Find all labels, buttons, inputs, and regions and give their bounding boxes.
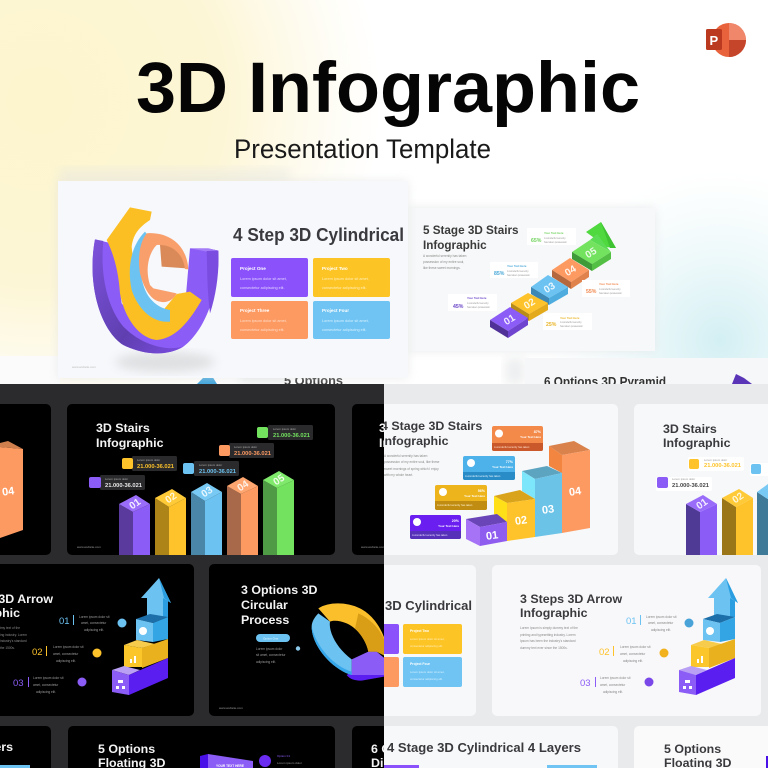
card 56%: A wonderful serenity has taken — [437, 503, 473, 507]
card 56%: 56% — [478, 489, 486, 493]
card: Project One — [231, 258, 308, 297]
chart: circular donut — [312, 603, 387, 681]
label 65%: Your Text Here — [544, 231, 564, 235]
label 85%: Your Text Here — [507, 264, 527, 268]
option marker — [259, 754, 302, 767]
slide heading: 5 Options — [664, 742, 721, 756]
dark slide: 3 Options 3D Circular Process — [209, 564, 384, 716]
step 01 note: adipiscing elit. — [651, 628, 671, 632]
label: orange value — [219, 443, 274, 458]
pillar 01: 01 — [128, 496, 143, 512]
step 03 note: adipiscing elit. — [603, 690, 623, 694]
card: Project Two: Project Two — [322, 266, 348, 271]
card: Project Three: consectetur adipiscing elit. — [240, 328, 285, 332]
label: blue value — [750, 463, 768, 476]
label 85%: 85% — [494, 271, 505, 277]
label 65% — [527, 228, 576, 245]
step 03: 03 — [542, 280, 558, 296]
label 45% — [448, 294, 497, 311]
background wash — [0, 0, 768, 384]
pillar 05 — [263, 471, 294, 555]
stair 03 — [522, 466, 562, 537]
dark slide: 6 Options fragment — [352, 726, 384, 768]
step 02 note: 02 — [32, 647, 43, 658]
option text: Lorem ipsum dolor — [256, 647, 283, 651]
dark half — [0, 384, 412, 768]
slide body text: tmy text of the — [0, 626, 20, 630]
slide body text: industry's standard — [0, 639, 27, 643]
slide heading: Infographic — [663, 436, 731, 450]
label 65%: 65% — [531, 238, 542, 244]
step 01 note — [626, 615, 694, 632]
slide heading: 5 Stage 3D Stairs — [423, 224, 519, 237]
label 85%: has taken possession — [507, 274, 531, 277]
slide body text: A wonderful serenity has taken — [384, 454, 428, 458]
pillar 04: 04 — [236, 478, 251, 494]
card: orange — [370, 657, 399, 687]
dark slide: 3D Stairs Infographic — [67, 404, 335, 555]
slide heading: Infographic — [520, 606, 588, 620]
pillar 05: 05 — [272, 472, 287, 488]
slide heading: 3 Steps 3D Arrow — [520, 592, 622, 606]
slide body text: A wonderful serenity has taken — [423, 254, 467, 258]
card: Project Two — [403, 624, 462, 654]
label 55%: A wonderful serenity — [599, 288, 621, 291]
step 03 note: amet, consectetur — [33, 683, 59, 687]
step 02 note — [32, 645, 102, 663]
option text: adipiscing elit. — [256, 660, 276, 664]
pillar 03 — [757, 484, 768, 555]
card: Project One: consectetur adipiscing elit. — [240, 286, 285, 290]
label: orange value: 21.000-36.021 — [234, 451, 271, 457]
card: Project Two: Lorem ipsum dolor sit amet, — [410, 637, 445, 641]
step 02 note: Lorem ipsum dolor sit — [53, 645, 84, 649]
footer url: www.website.com — [219, 706, 243, 710]
button — [256, 634, 290, 642]
label 25%: Your Text Here — [560, 316, 580, 320]
stair 02 — [494, 490, 535, 541]
arrow stack — [679, 578, 738, 695]
step 03 note: 03 — [13, 678, 24, 689]
pillar 02: 02 — [731, 490, 746, 506]
dark slide: layers fragment — [0, 726, 51, 768]
pillar 03 — [191, 483, 222, 555]
floating plate: YOUR TEXT HERE — [216, 764, 244, 768]
dark slide: right fragment: 3D — [379, 421, 395, 435]
label 25%: A wonderful serenity — [560, 321, 582, 324]
label: yellow value: 21.000-36.021 — [137, 464, 174, 470]
slide heading: Infographic — [381, 434, 449, 448]
card: Project Four: consectetur adipiscing elit. — [322, 328, 367, 332]
slide heading: 3D Arrow — [0, 592, 53, 606]
label 55%: 55% — [586, 289, 597, 295]
option bars — [384, 765, 597, 768]
dark slide: 4 Stage stairs fragment — [0, 404, 51, 555]
peeking row behind the slides: 6 Options 3D Pyramid — [544, 374, 666, 389]
label 55%: has taken possession — [599, 292, 623, 295]
pillar 03: 03 — [200, 484, 215, 500]
step 02 note: amet, consectetur — [620, 652, 646, 656]
card: Project Four: consectetur adipiscing elit. — [410, 677, 443, 681]
label: green value: Lorem ipsum dolor — [273, 427, 296, 431]
slide body text: ing industry. Lorem — [0, 633, 27, 637]
subtitle: Presentation Template — [234, 134, 491, 164]
step 02 note — [599, 645, 668, 663]
chart: 3D cylindrical rings — [93, 207, 219, 353]
label 55%: Your Text Here — [599, 282, 619, 286]
stair 01 — [466, 514, 507, 546]
step 01 — [490, 307, 528, 338]
label: orange value: Lorem ipsum dolor — [234, 445, 257, 449]
dark slide: 3 Steps 3D Arrow — [0, 564, 194, 716]
step 01 note: Lorem ipsum dolor sit — [79, 615, 110, 619]
label: green value — [257, 425, 313, 440]
step 02 note: amet, consectetur — [53, 652, 79, 656]
label 45%: 45% — [453, 304, 464, 310]
label: blue value — [183, 461, 239, 476]
card: Project Two: Project Two — [410, 629, 429, 633]
step 03 note: Lorem ipsum dolor sit — [600, 676, 631, 680]
dark slide: 6 Options fragment: 6 O — [371, 742, 391, 756]
step 01 note: amet, consectetur — [648, 621, 674, 625]
label 25%: 25% — [546, 322, 557, 328]
card 77%: 77% — [506, 460, 514, 464]
label 55% — [582, 280, 630, 297]
card: Project Three: Project Three — [240, 308, 270, 313]
title: 3D Infographic — [136, 49, 640, 128]
card: Project Four: Project Four — [410, 662, 431, 666]
slide body text: like these sweet mornings. — [423, 266, 461, 270]
card 20%: A wonderful serenity has taken — [412, 533, 448, 537]
label: yellow value — [122, 456, 177, 471]
icon: PowerPoint logo: P — [710, 33, 718, 48]
label: green value: 21.000-36.021 — [273, 433, 310, 439]
pillar 02 — [155, 489, 186, 555]
label: purple value: 21.000-36.021 — [672, 483, 709, 489]
step 01 note — [59, 615, 126, 632]
card: Project Four — [313, 301, 390, 339]
step 01: 01 — [502, 312, 518, 328]
card 77% — [463, 456, 515, 480]
label: purple value — [89, 475, 145, 490]
slide heading: 3D Stairs — [96, 421, 150, 435]
slide heading: 3D Cylindrical — [385, 598, 472, 613]
stair 04: 04 — [568, 485, 583, 499]
light slide: 3D Cylindrical fragment — [370, 565, 476, 716]
pillar 01: 01 — [695, 496, 710, 512]
card 77%: A wonderful serenity has taken — [465, 474, 501, 478]
slide heading: 3 Options 3D — [241, 583, 317, 597]
step 04: 04 — [563, 263, 579, 279]
card: Project Four — [403, 657, 462, 687]
step 02 note: Lorem ipsum dolor sit — [620, 645, 651, 649]
light slide: 5 Options Floating 3D — [634, 726, 768, 768]
card: Project Two: consectetur adipiscing elit. — [322, 286, 367, 290]
slide body text: printing and typesetting industry. Lorem — [520, 633, 576, 637]
label 85% — [490, 262, 538, 278]
step 01 note: amet, consectetur — [81, 621, 107, 625]
step 01 note: Lorem ipsum dolor sit — [646, 615, 677, 619]
pillar 04 — [227, 477, 258, 555]
step 01 note: 01 — [59, 616, 70, 627]
card 87% — [492, 426, 543, 451]
slide heading: Circular — [241, 598, 288, 612]
step 03 note: Lorem ipsum dolor sit — [33, 676, 64, 680]
step 01 note: 01 — [626, 616, 637, 627]
slide heading: 3D Stairs — [663, 422, 717, 436]
pillar 01 — [686, 495, 717, 555]
step 03 note — [13, 676, 86, 694]
stair 02: 02 — [514, 514, 528, 528]
step 02 — [511, 293, 548, 321]
label: purple value: Lorem ipsum dolor — [672, 477, 695, 481]
card: Project Two — [313, 258, 390, 297]
floating plate — [200, 754, 253, 768]
label: blue value: 21.000-36.021 — [199, 469, 236, 475]
slide heading: 4 Step 3D Cylindrical — [233, 225, 404, 245]
step 03 — [531, 275, 568, 305]
dark slide: 5 Options Floating 3D — [68, 726, 335, 768]
light slide: 3D Stairs Infographic — [634, 404, 768, 555]
pillar 02: 02 — [164, 490, 179, 506]
dark slide: 4 Stage stairs fragment: 04 — [1, 485, 16, 499]
label: yellow value: Lorem ipsum dolor — [704, 458, 727, 462]
slide body text: with my whole heart. — [384, 473, 413, 477]
footer url: www.website.com — [77, 545, 101, 549]
step 05 with arrow — [572, 222, 616, 271]
card 87%: Your Text Here — [520, 435, 541, 439]
step 03 note: amet, consectetur — [600, 683, 626, 687]
step 02 note: adipiscing elit. — [56, 659, 76, 663]
label 45%: Your Text Here — [467, 296, 487, 300]
slide body text: the 1500s. — [0, 646, 15, 650]
slide body text: possession of my entire soul, — [423, 260, 464, 264]
slide heading: 5 Options — [98, 742, 155, 756]
label: blue value: Lorem ipsum dolor — [199, 463, 222, 467]
stair 03: 03 — [541, 503, 555, 517]
step 02: 02 — [522, 296, 538, 312]
step 03 note: 03 — [580, 678, 591, 689]
dark slide: right fragment — [352, 404, 384, 555]
step 02 note: adipiscing elit. — [623, 659, 643, 663]
light slide: 3 Steps 3D Arrow Infographic — [492, 565, 761, 716]
dark slide: right fragment: www.website.com — [361, 545, 385, 549]
label: yellow value — [688, 457, 744, 471]
label 45%: has taken possession — [467, 306, 491, 309]
card: Project Two: Lorem ipsum dolor sit amet, — [322, 277, 369, 281]
arrow stack — [112, 578, 171, 695]
shadow under the rings — [115, 352, 215, 372]
label 85%: A wonderful serenity — [507, 270, 529, 273]
slide body text: sweet mornings of spring which I enjoy — [384, 467, 439, 471]
card: Project Two: consectetur adipiscing elit. — [410, 644, 443, 648]
card: Project Three: Lorem ipsum dolor sit amet, — [240, 319, 287, 323]
card: Project Four: Lorem ipsum dolor sit amet, — [322, 319, 369, 323]
slide body text: Ipsum has been the industry's standard — [520, 639, 576, 643]
label: purple value: Lorem ipsum dolor — [105, 477, 128, 481]
card 56%: Your Text Here — [464, 494, 485, 498]
slide heading: Infographic — [423, 239, 487, 252]
light slide: 4 Stage 3D Stairs Infographic — [370, 404, 618, 555]
slide heading: 4 Stage 3D Stairs — [381, 419, 482, 433]
label: purple value: 21.000-36.021 — [105, 483, 142, 489]
label 25%: has taken possession — [560, 325, 584, 328]
label: purple value — [656, 477, 712, 491]
step 03 note: adipiscing elit. — [36, 690, 56, 694]
slide body text: possession of my entire soul, like these — [384, 460, 440, 464]
button: Option One — [263, 636, 279, 640]
step 03 note — [580, 676, 654, 694]
step 01 note: adipiscing elit. — [84, 628, 104, 632]
step 04 — [552, 258, 589, 289]
card 20%: Your Text Here — [438, 524, 459, 528]
peeking row behind the slides — [0, 356, 768, 389]
stair 01: 01 — [485, 529, 499, 543]
footer url: www.website.com — [72, 365, 96, 369]
slide heading: Process — [241, 613, 289, 627]
option text: sit amet, consectetur — [256, 653, 286, 657]
option marker: Lorem ipsum dolor — [277, 761, 302, 765]
card: Project One: Project One — [240, 266, 266, 271]
label: yellow value: 21.000-36.021 — [704, 463, 741, 469]
step 05 with arrow: 05 — [584, 246, 599, 261]
card 87%: 87% — [534, 430, 542, 434]
icon: PowerPoint logo — [706, 23, 746, 57]
card: Project Four: Lorem ipsum dolor sit amet, — [410, 670, 445, 674]
card 20% — [410, 515, 461, 539]
option marker: Option 01 — [277, 754, 290, 758]
slide: 4 Step 3D Cylindrical — [58, 181, 408, 378]
light half — [370, 384, 768, 768]
step 02 note: 02 — [599, 647, 610, 658]
label 45%: A wonderful serenity — [467, 302, 489, 305]
pillar 01 — [119, 495, 150, 555]
slide: 5 Stage 3D Stairs — [406, 208, 655, 351]
label 65%: A wonderful serenity — [544, 237, 566, 240]
light slide: 4 Stage 3D Cylindrical 4 Layers — [370, 726, 618, 768]
label 65%: has taken possession — [544, 241, 568, 244]
peeking row behind the slides: 5 Options — [284, 373, 343, 388]
card: Project Three — [231, 301, 308, 339]
card 87%: A wonderful serenity has taken — [494, 445, 530, 449]
slide heading: Infographic — [96, 436, 164, 450]
pillar 02 — [722, 489, 753, 555]
slide body text: Lorem Ipsum is simply dummy text of the — [520, 626, 578, 630]
card 20%: 20% — [452, 519, 460, 523]
label 25% — [543, 313, 592, 330]
card 77%: Your Text Here — [492, 465, 513, 469]
slide heading: 4 Stage 3D Cylindrical 4 Layers — [387, 740, 581, 755]
card 56% — [435, 485, 487, 510]
stair 04 — [549, 441, 590, 533]
label: yellow value: Lorem ipsum dolor — [137, 458, 160, 462]
card: Project One: Lorem ipsum dolor sit amet, — [240, 277, 287, 281]
dark slide: right fragment: In — [379, 436, 390, 450]
card: Project Four: Project Four — [322, 308, 349, 313]
slide body text: dummy text ever since the 1500s. — [520, 646, 568, 650]
card: purple — [370, 624, 399, 654]
